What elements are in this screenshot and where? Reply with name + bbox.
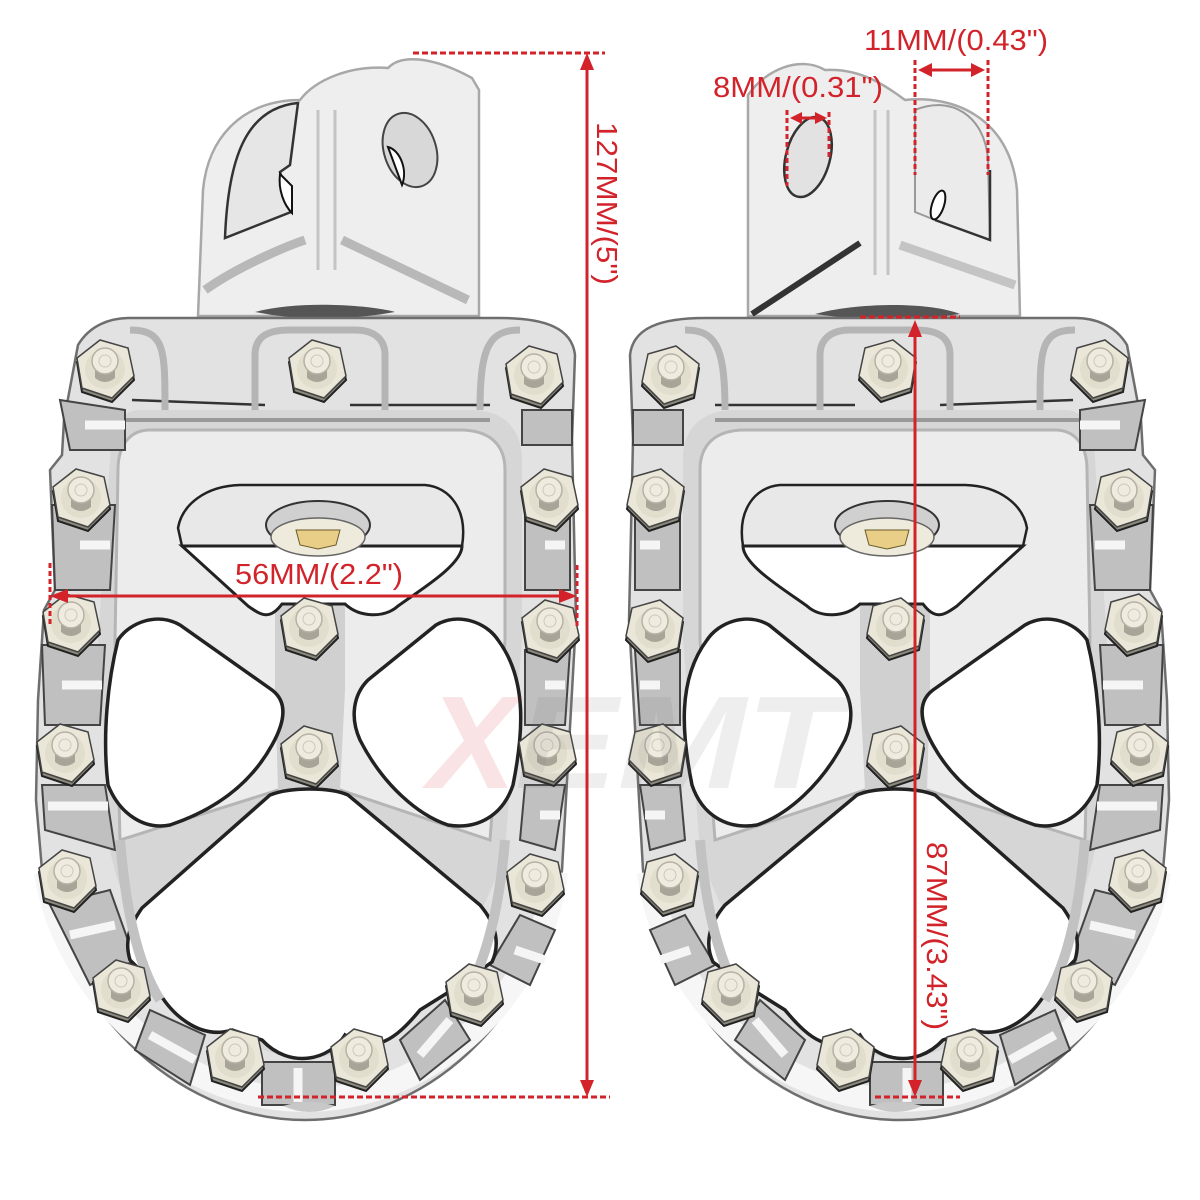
watermark bbox=[421, 669, 851, 816]
right mounting clevis bbox=[748, 64, 1020, 320]
watermark: X bbox=[421, 669, 523, 816]
dimension: width 56mm: 56MM/(2.2") bbox=[235, 559, 403, 591]
right footplate bbox=[626, 318, 1169, 1120]
dimension: clevis gap 11mm bbox=[864, 25, 1048, 175]
dimension: slot 8mm bbox=[713, 72, 883, 186]
dimension: total length 127mm bbox=[258, 53, 622, 1097]
dimension: width 56mm bbox=[50, 559, 577, 626]
watermark: EMT bbox=[515, 669, 851, 816]
dimension: slot 8mm: 8MM/(0.31") bbox=[713, 72, 883, 104]
dimension: plate length 87mm: 87MM/(3.43") bbox=[920, 842, 952, 1030]
dimension: clevis gap 11mm: 11MM/(0.43") bbox=[864, 25, 1048, 57]
dimension: plate length 87mm bbox=[860, 317, 960, 1097]
left footplate bbox=[36, 318, 579, 1120]
left mounting clevis bbox=[198, 59, 479, 318]
left footpeg bbox=[36, 59, 579, 1120]
right footpeg bbox=[626, 64, 1169, 1120]
dimension: total length 127mm: 127MM/(5") bbox=[590, 122, 622, 285]
